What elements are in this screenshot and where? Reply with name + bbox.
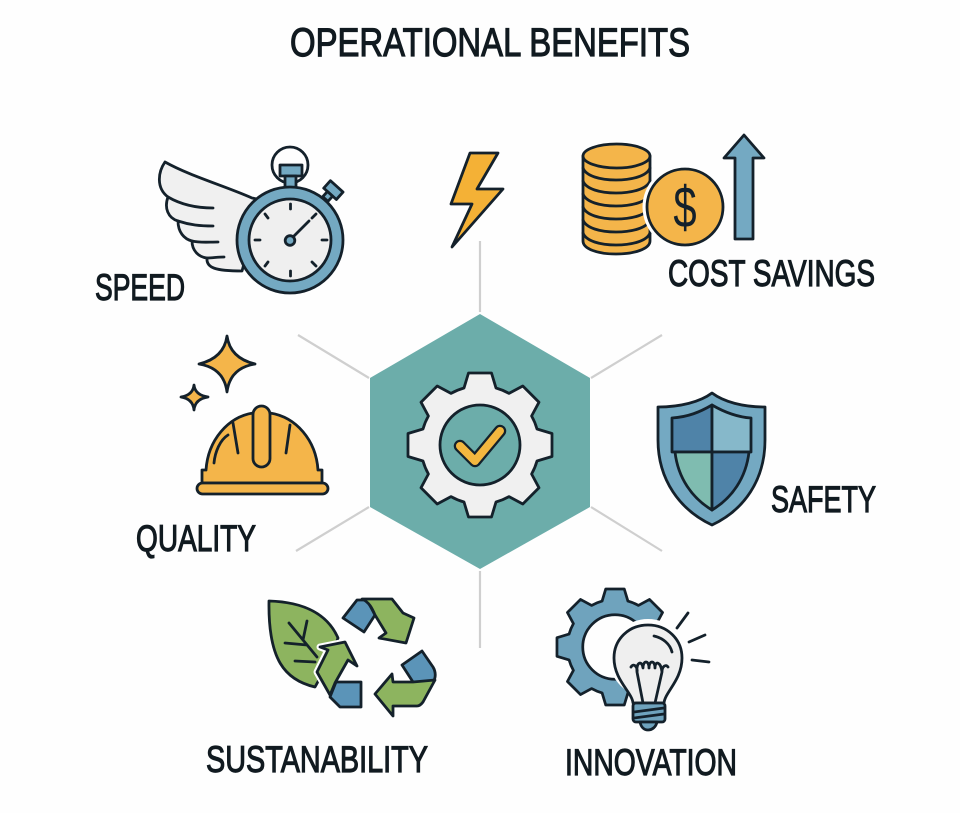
filament xyxy=(631,662,668,703)
icon: winged stopwatch xyxy=(159,147,343,293)
left arrow halo and arrow xyxy=(317,642,357,695)
bulb halo xyxy=(609,619,687,697)
label: safety: SAFETY xyxy=(771,479,876,520)
icon: central gear xyxy=(408,373,552,517)
bulb xyxy=(614,625,682,703)
icon: coins and arrow xyxy=(583,135,764,254)
icon: coins and arrow: $ xyxy=(673,174,697,240)
gear xyxy=(557,589,673,705)
label: speed: SPEED xyxy=(95,267,185,308)
title: OPERATIONAL BENEFITS xyxy=(290,21,690,65)
up arrow xyxy=(724,135,764,239)
dollar coin xyxy=(647,169,723,245)
bulb base xyxy=(633,703,665,722)
wing xyxy=(159,162,262,271)
central hexagon with gear xyxy=(370,314,590,569)
dial xyxy=(237,187,343,293)
icon: lightning bolt xyxy=(451,153,503,247)
icon: leaf and recycling arrows xyxy=(269,599,435,716)
top arrow xyxy=(343,600,375,632)
coin stack xyxy=(583,144,650,254)
icon: check mark xyxy=(460,431,500,461)
label: sustainability: SUSTANABILITY xyxy=(206,739,428,780)
rays xyxy=(677,613,709,662)
icon: shield xyxy=(658,393,765,525)
icon: gear and light bulb xyxy=(557,589,709,730)
label: cost savings: COST SAVINGS xyxy=(668,253,875,294)
leaf xyxy=(269,601,338,687)
label: quality: QUALITY xyxy=(136,518,256,559)
connector lines xyxy=(296,241,662,648)
icon: hard hat with sparkles xyxy=(181,336,328,494)
label: innovation: INNOVATION xyxy=(565,742,737,783)
right arrow xyxy=(402,651,435,682)
crown xyxy=(272,147,308,183)
